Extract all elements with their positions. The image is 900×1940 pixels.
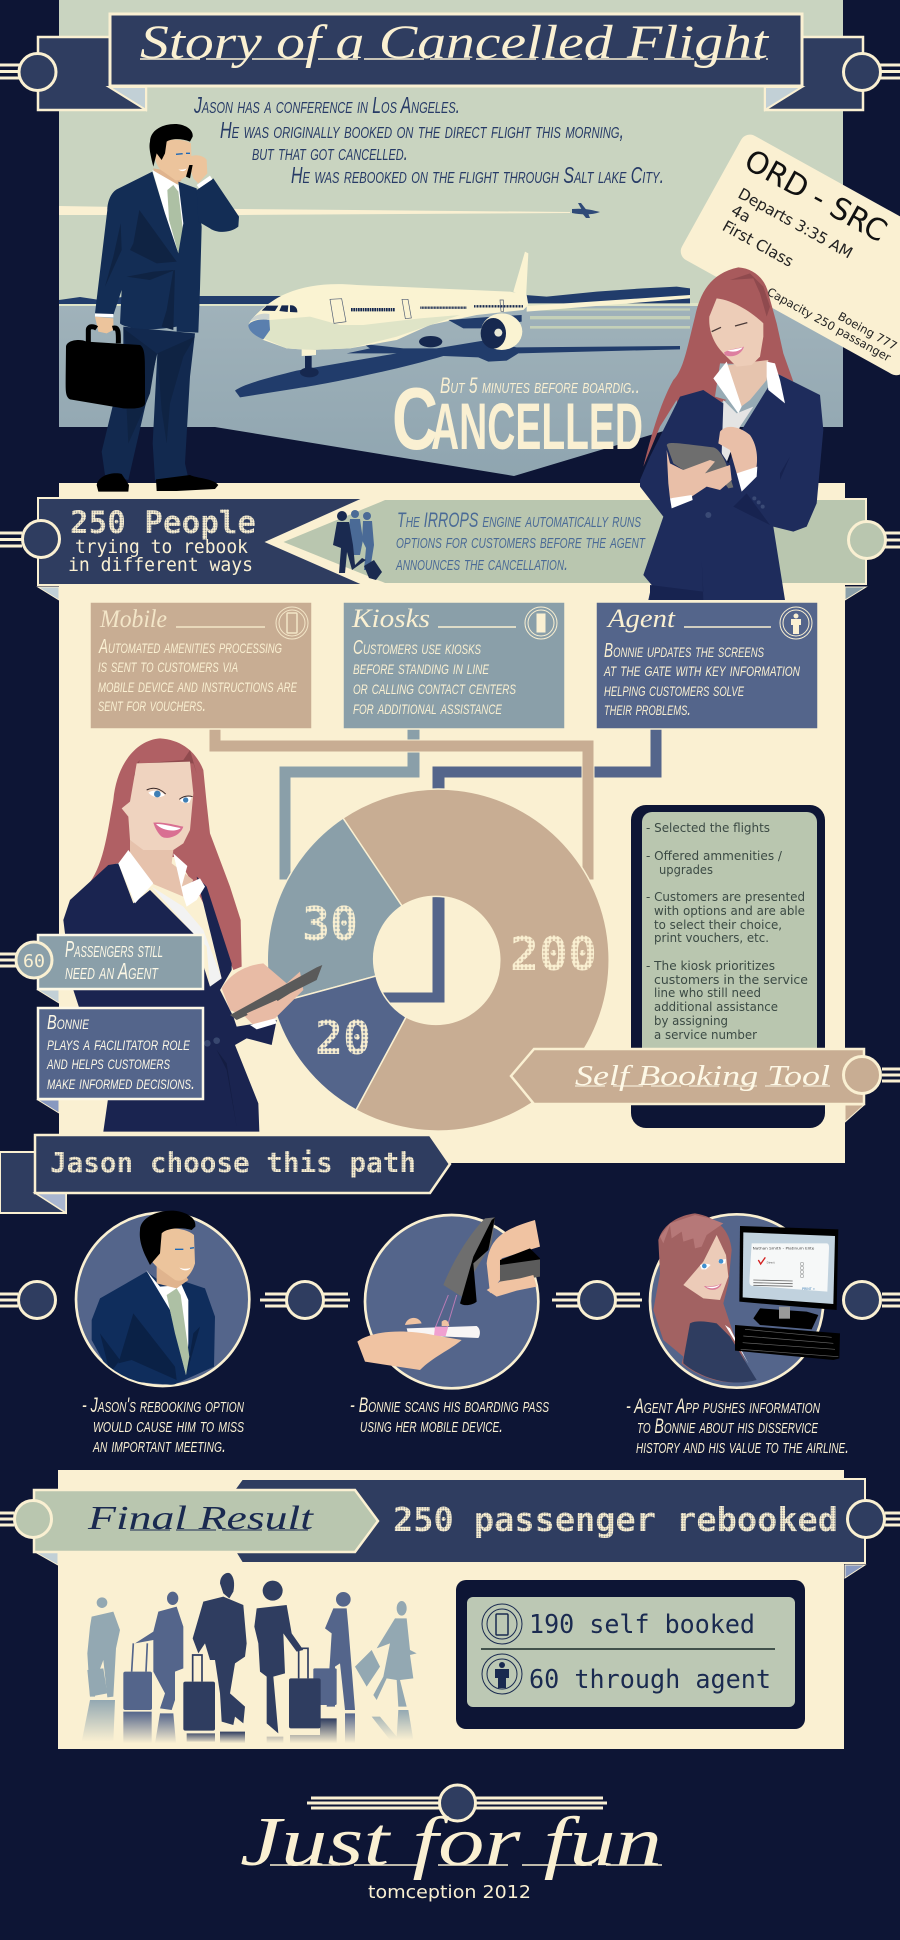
- card: agent: at the gate with key information: [603, 659, 801, 681]
- label: Bonnie role: Bonnie: [47, 1012, 89, 1034]
- illustration: Bonnie looking at tablet, upper right: [640, 267, 823, 600]
- text block: step captions: - Jason's rebooking option: [82, 1394, 244, 1417]
- connector: mobile line to chart: [209, 729, 594, 880]
- banner: title: [0, 14, 900, 110]
- callout: boarding pass: ORD - SRC: [738, 143, 892, 250]
- banner: 250 people and IRROPS explanation: in different ways: [68, 554, 253, 576]
- card: kiosks: Customers use kiosks: [353, 637, 481, 659]
- label: 60 passengers still need an agent: Passengers still: [65, 936, 163, 962]
- panel: kiosk phone details: - The kiosk prioritizes: [646, 959, 775, 973]
- text block: intro story: Jason has a conference in Los Angeles.: [193, 92, 460, 118]
- callout: boarding pass: Capacity 250 passanger: [765, 285, 893, 364]
- text block: step captions: would cause him to miss: [93, 1414, 244, 1437]
- icon: travellers silhouette: [333, 510, 382, 580]
- banner: 250 people and IRROPS explanation: trying to rebook: [75, 536, 249, 558]
- icon: small plane in the sky: [572, 203, 600, 218]
- card: agent: Agent: [606, 604, 676, 633]
- icon: agent person: [780, 607, 812, 639]
- text block: intro story: He was rebooked on the flight through Salt lake City.: [291, 162, 664, 188]
- card: mobile: is sent to customers via: [98, 655, 238, 677]
- illustration: boarding pass scan in circle: [357, 1215, 540, 1388]
- banner: 250 people and IRROPS explanation: options for customers before the agent: [396, 530, 646, 553]
- connectors: path nodes: [0, 1282, 900, 1318]
- panel: kiosk phone details: - Selected the flights: [646, 821, 770, 835]
- card: kiosks: for additional assistance: [353, 697, 502, 719]
- illustration: agent at computer in circle: PRINT »: [802, 1287, 815, 1291]
- banner: final result: Final Result: [87, 1500, 315, 1537]
- card: agent: Bonnie updates the screens: [604, 640, 764, 662]
- banner: Jason choose this path: [0, 1135, 450, 1213]
- banner: 250 people and IRROPS explanation: [0, 498, 900, 600]
- illustration: agent at computer in circle: Nathan Smith - Platinum Elite: [753, 1246, 815, 1250]
- card: agent: their problems.: [604, 698, 691, 720]
- card: kiosks: before standing in line: [353, 657, 489, 679]
- banner: 250 people and IRROPS explanation: The IRROPS engine automatically runs: [397, 509, 641, 532]
- banner: final result: [0, 1479, 900, 1578]
- panel: kiosk phone details: print vouchers, etc.: [654, 931, 769, 945]
- card: kiosks: Kiosks: [351, 604, 430, 633]
- card: mobile: mobile device and instructions are: [98, 675, 297, 697]
- banner: self booking tool: [511, 1049, 900, 1122]
- illustration: Jason portrait in circle: [76, 1211, 249, 1386]
- text block: step captions: using her mobile device.: [360, 1414, 503, 1437]
- panel: result display: 190 self booked: [529, 1610, 755, 1640]
- callout: boarding pass: [677, 131, 900, 379]
- text block: intro story: but that got cancelled.: [252, 139, 408, 165]
- heading: cancelled: ANCELLED: [431, 389, 643, 463]
- chart: donut of rebooking channels: [267, 789, 609, 1131]
- connector: agent line to chart: [382, 729, 662, 1003]
- text block: intro story: [193, 92, 664, 188]
- text block: step captions: [82, 1394, 849, 1458]
- illustration: agent at computer in circle: Direct: [767, 1260, 775, 1264]
- callout: boarding pass: Departs 3:35 AM: [735, 185, 856, 262]
- footer: credit: [240, 1785, 662, 1903]
- connector: kiosk line to chart: [279, 729, 420, 880]
- label: 60 passengers still need an agent: [0, 935, 203, 1003]
- banner: 250 people and IRROPS explanation: announces the cancellation.: [395, 552, 568, 575]
- banner: self booking tool: Self Booking Tool: [575, 1061, 830, 1092]
- panel: kiosk phone details: customers in the service: [654, 973, 808, 987]
- label: Bonnie role: make informed decisions.: [47, 1072, 195, 1094]
- panel: kiosk phone details: - Customers are presented: [646, 890, 805, 904]
- panel: kiosk phone details: - Offered ammenities /: [646, 849, 783, 863]
- card: mobile: Mobile: [99, 606, 167, 633]
- panel: result display: 60 through agent: [529, 1665, 771, 1695]
- panel: kiosk phone details: additional assistance: [654, 1000, 778, 1014]
- panel: kiosk phone details: by assigning: [654, 1014, 728, 1028]
- card: agent: helping customers solve: [604, 679, 744, 701]
- icon: agent person: [482, 1654, 522, 1694]
- callout: boarding pass: First Class: [719, 217, 797, 271]
- banner: 250 people and IRROPS explanation: 250 People: [70, 505, 256, 541]
- text block: step captions: - Bonnie scans his boarding pass: [350, 1394, 549, 1417]
- chart: donut of rebooking channels: 20: [315, 1011, 371, 1065]
- panel: kiosk phone details: to select their choice,: [654, 918, 782, 932]
- icon: kiosk: [525, 607, 557, 639]
- footer: credit: Just for fun: [240, 1804, 662, 1881]
- panel: kiosk phone details: with options and are able: [654, 904, 805, 918]
- callout: boarding pass: Boeing 777: [836, 309, 900, 353]
- label: Bonnie role: and helps customers: [46, 1052, 170, 1074]
- card: mobile: [90, 602, 312, 729]
- card: agent: [596, 602, 818, 729]
- heading: cancelled: But 5 minutes before boardig..: [440, 373, 640, 398]
- panel: kiosk phone details: upgrades: [659, 863, 713, 877]
- panel: kiosk phone details: a service number: [654, 1028, 757, 1042]
- illustration: Bonnie with tablet, left: [63, 738, 322, 1132]
- card: mobile: sent for vouchers.: [98, 694, 206, 716]
- heading: cancelled: C: [392, 369, 438, 468]
- label: Bonnie role: plays a facilitator role: [47, 1033, 190, 1055]
- panel: result display: [456, 1580, 805, 1729]
- callout: boarding pass: 4a: [728, 201, 754, 226]
- card: kiosks: or calling contact centers: [353, 677, 516, 699]
- banner: Jason choose this path: Jason choose this path: [50, 1146, 416, 1179]
- banner: final result: 250 passenger rebooked: [393, 1500, 838, 1539]
- label: Bonnie role: [38, 1008, 203, 1113]
- text block: step captions: an important meeting.: [92, 1434, 226, 1457]
- panel: kiosk phone details: line who still need: [654, 986, 761, 1000]
- card: kiosks: [343, 602, 565, 729]
- panel: airport scene: [59, 0, 843, 476]
- panel: cream content area: [59, 483, 845, 1163]
- banner: title: Story of a Cancelled Flight: [140, 16, 770, 69]
- panel: final result background: [58, 1470, 844, 1749]
- chart: donut of rebooking channels: 200: [510, 927, 597, 981]
- panel: kiosk phone details: [631, 805, 825, 1128]
- label: 60 passengers still need an agent: need an Agent: [65, 958, 159, 984]
- card: mobile: Automated amenities processing: [98, 636, 282, 658]
- illustration: passenger silhouettes: [82, 1573, 417, 1743]
- icon: self booked device: [482, 1604, 522, 1644]
- illustration: agent at computer in circle: [650, 1213, 840, 1388]
- label: 60 passengers still need an agent: 60: [23, 951, 45, 972]
- footer: credit: tomception 2012: [368, 1882, 531, 1903]
- icon: mobile device: [276, 607, 308, 639]
- heading: cancelled: [392, 369, 643, 468]
- chart: donut of rebooking channels: 30: [302, 897, 358, 951]
- illustration: airliner on the runway: [230, 252, 690, 397]
- illustration: Jason with phone and briefcase: [66, 124, 239, 492]
- text block: intro story: He was originally booked on the direct flight this morning,: [220, 117, 624, 143]
